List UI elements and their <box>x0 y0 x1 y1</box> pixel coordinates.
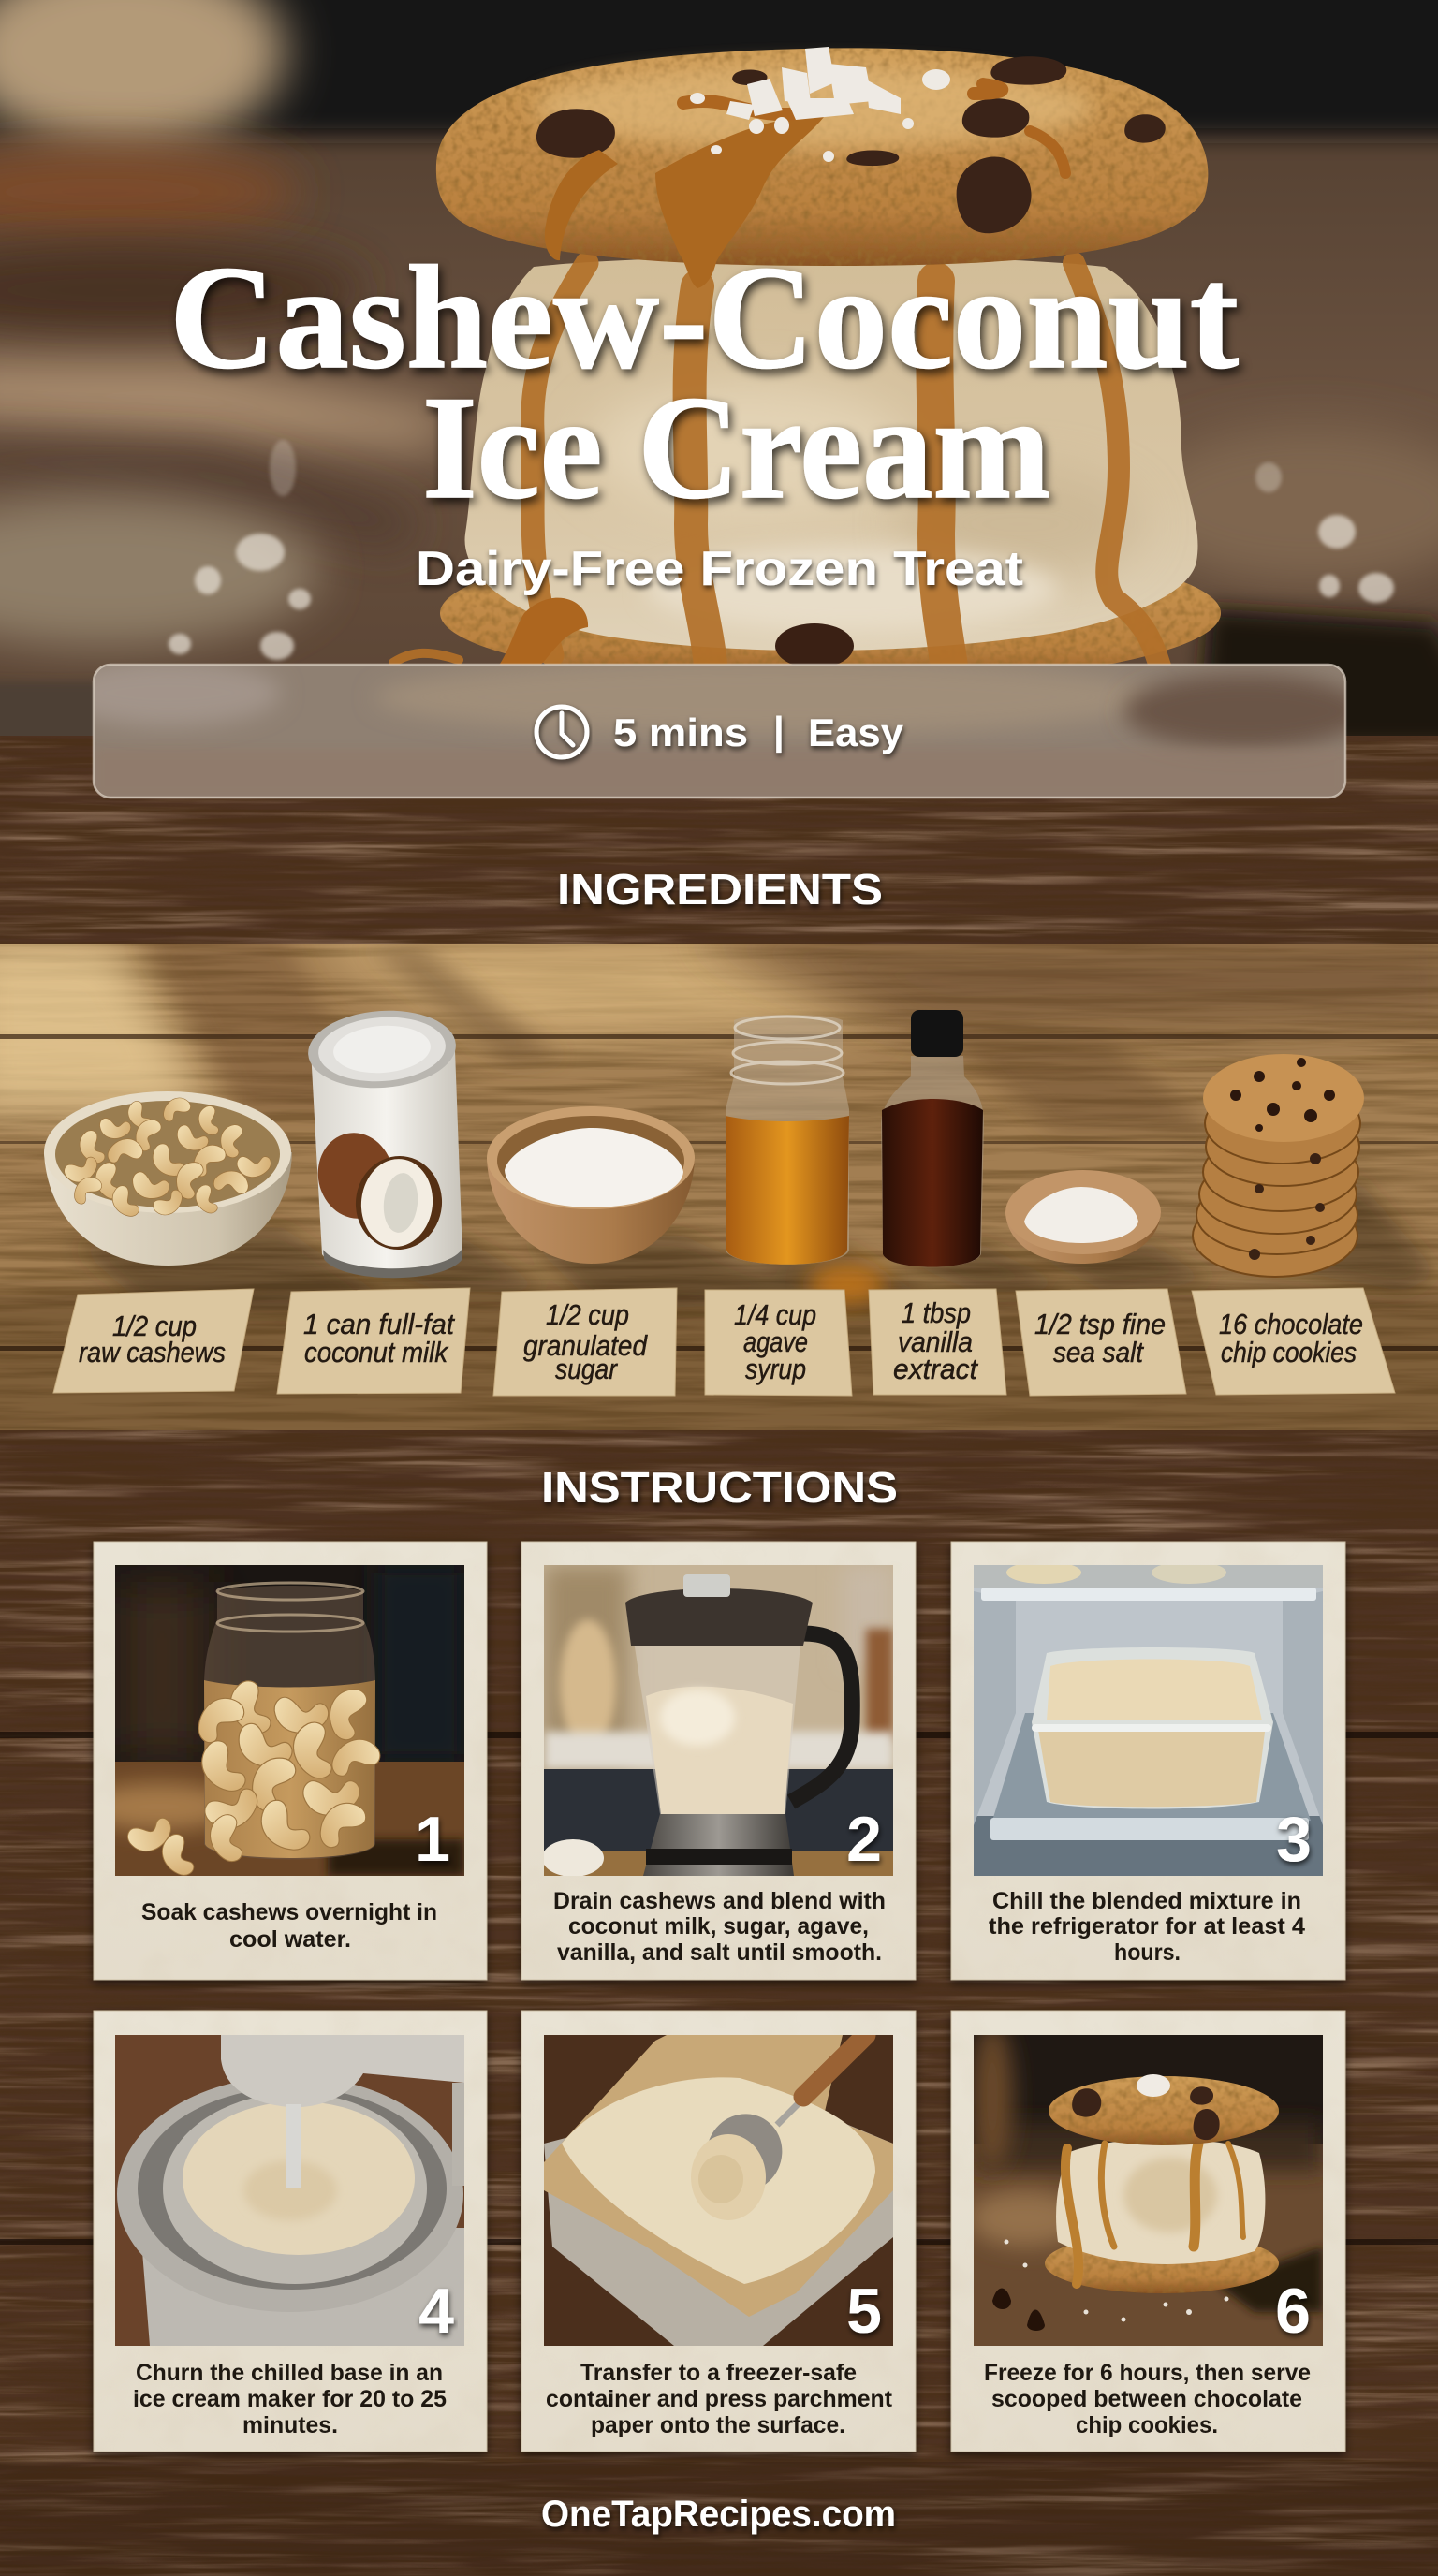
text: step 6 <box>984 2360 1311 2438</box>
glass time panel <box>56 660 1367 798</box>
label: agave: 1/4 cup <box>734 1298 816 1331</box>
item: cashew bowl <box>44 1091 292 1266</box>
step card 2 <box>521 1542 916 1980</box>
label: sea salt <box>1034 1308 1166 1368</box>
chocolate chips <box>536 56 1166 242</box>
time and difficulty <box>613 709 904 754</box>
item: vanilla extract bottle <box>881 1010 984 1267</box>
text: step 6: chip cookies. <box>1076 2412 1218 2438</box>
heading: instructions: INSTRUCTIONS <box>541 1463 898 1512</box>
title: Ice Cream <box>422 366 1050 530</box>
label: sugar: granulated <box>523 1329 649 1362</box>
label: vanilla <box>893 1296 978 1385</box>
label: agave: syrup <box>745 1353 806 1385</box>
caramel drips <box>393 263 1161 674</box>
label: cookies <box>1219 1308 1363 1368</box>
text: step 6: Freeze for 6 hours, then serve <box>984 2360 1311 2386</box>
step number 3: 3 <box>1276 1804 1312 1875</box>
label: raw cashews <box>79 1310 226 1368</box>
item: agave syrup jar <box>726 1015 849 1265</box>
step number 5: 5 <box>846 2276 882 2347</box>
ice cream scoop <box>465 256 1197 651</box>
label: sea salt: sea salt <box>1053 1336 1144 1368</box>
caramel on cookie <box>545 116 824 288</box>
icon: clock <box>536 707 587 757</box>
label: vanilla: 1 tbsp <box>902 1296 971 1329</box>
coconut illustration on can <box>310 1126 447 1254</box>
text: step 4: minutes. <box>242 2412 338 2438</box>
footer website: OneTapRecipes.com <box>541 2494 896 2535</box>
chocolate in lower cookie <box>775 623 854 668</box>
top cookie <box>436 47 1208 288</box>
step card 5 <box>521 2011 916 2452</box>
time and difficulty: 5 mins <box>613 710 748 754</box>
item: coconut milk can <box>305 1006 462 1278</box>
flaky salt <box>690 47 950 162</box>
label: sea salt: 1/2 tsp fine <box>1034 1308 1166 1340</box>
text: step 1: Soak cashews overnight in <box>141 1899 437 1925</box>
text: step 3: Chill the blended mixture in <box>992 1888 1301 1914</box>
label: agave: agave <box>743 1325 808 1358</box>
text: step 4: Churn the chilled base in an <box>136 2360 443 2386</box>
label: cookies: 16 chocolate <box>1219 1308 1363 1340</box>
text: step 2: Drain cashews and blend with <box>553 1888 886 1914</box>
ingredient labels <box>53 1288 1395 1396</box>
text: step 1 <box>141 1899 437 1953</box>
text: step 4 <box>133 2360 447 2438</box>
item: cookie stack <box>1193 1054 1364 1277</box>
time and difficulty: Easy <box>808 710 904 754</box>
text: step 5: Transfer to a freezer-safe <box>580 2360 857 2386</box>
time and difficulty: | <box>773 709 785 754</box>
label: vanilla: vanilla <box>898 1325 973 1358</box>
photo: mixture chilling in refrigerator <box>974 1561 1323 1876</box>
text: step 2: coconut milk, sugar, agave, <box>568 1913 869 1939</box>
subtitle: Dairy-Free Frozen Treat <box>416 542 1023 596</box>
step number 4: 4 <box>418 2276 454 2347</box>
text: step 5 <box>546 2360 893 2438</box>
photo: cashews soaking in jar <box>84 1565 464 1880</box>
label: cookies: chip cookies <box>1221 1336 1357 1368</box>
step card 3 <box>951 1542 1345 1980</box>
text: step 5: paper onto the surface. <box>591 2412 845 2438</box>
photo: finished ice cream sandwich <box>969 2022 1323 2347</box>
photo: blender <box>542 1565 893 1877</box>
step card 6 <box>951 2011 1345 2452</box>
blurred salt crystals <box>169 440 1394 660</box>
title: Cashew-Coconut <box>169 236 1239 400</box>
step number 6: 6 <box>1275 2276 1311 2347</box>
text: step 3: hours. <box>1114 1939 1181 1966</box>
label: raw cashews: raw cashews <box>79 1336 226 1368</box>
step number 1: 1 <box>415 1804 450 1875</box>
photo: parchment tray with scoop <box>544 2035 893 2347</box>
text: step 1: cool water. <box>229 1926 351 1953</box>
label: coconut milk: 1 can full-fat <box>303 1308 455 1340</box>
heading: ingredients: INGREDIENTS <box>557 865 883 914</box>
text: step 5: container and press parchment <box>546 2386 893 2412</box>
panel: ingredients photo <box>0 936 1438 1446</box>
label: vanilla: extract <box>893 1353 978 1385</box>
text: step 6: scooped between chocolate <box>991 2386 1302 2412</box>
cast shadows <box>75 1179 1438 1310</box>
item: sea salt dish <box>1005 1170 1161 1264</box>
text: step 2 <box>553 1888 886 1966</box>
text: step 3 <box>989 1888 1305 1966</box>
label: coconut milk <box>303 1308 455 1368</box>
title <box>169 236 1239 530</box>
label: raw cashews: 1/2 cup <box>112 1310 197 1342</box>
caramel pool on lower cookie <box>500 597 588 665</box>
photo: ice cream maker <box>115 2035 464 2347</box>
label: sugar: sugar <box>555 1353 618 1385</box>
text: step 3: the refrigerator for at least 4 <box>989 1913 1305 1939</box>
label: coconut milk: coconut milk <box>304 1336 448 1368</box>
item: sugar bowl <box>487 1106 695 1264</box>
bottom cookie <box>440 580 1221 665</box>
label: sugar: 1/2 cup <box>546 1298 629 1331</box>
text: step 4: ice cream maker for 20 to 25 <box>133 2386 447 2412</box>
step card 1 <box>84 1542 487 1980</box>
text: step 2: vanilla, and salt until smooth. <box>557 1939 882 1966</box>
label: agave <box>734 1298 816 1385</box>
step number 2: 2 <box>846 1804 882 1875</box>
hero photo: ice cream sandwich <box>0 0 1438 749</box>
label: sugar <box>523 1298 649 1385</box>
step card 4 <box>94 2011 487 2452</box>
